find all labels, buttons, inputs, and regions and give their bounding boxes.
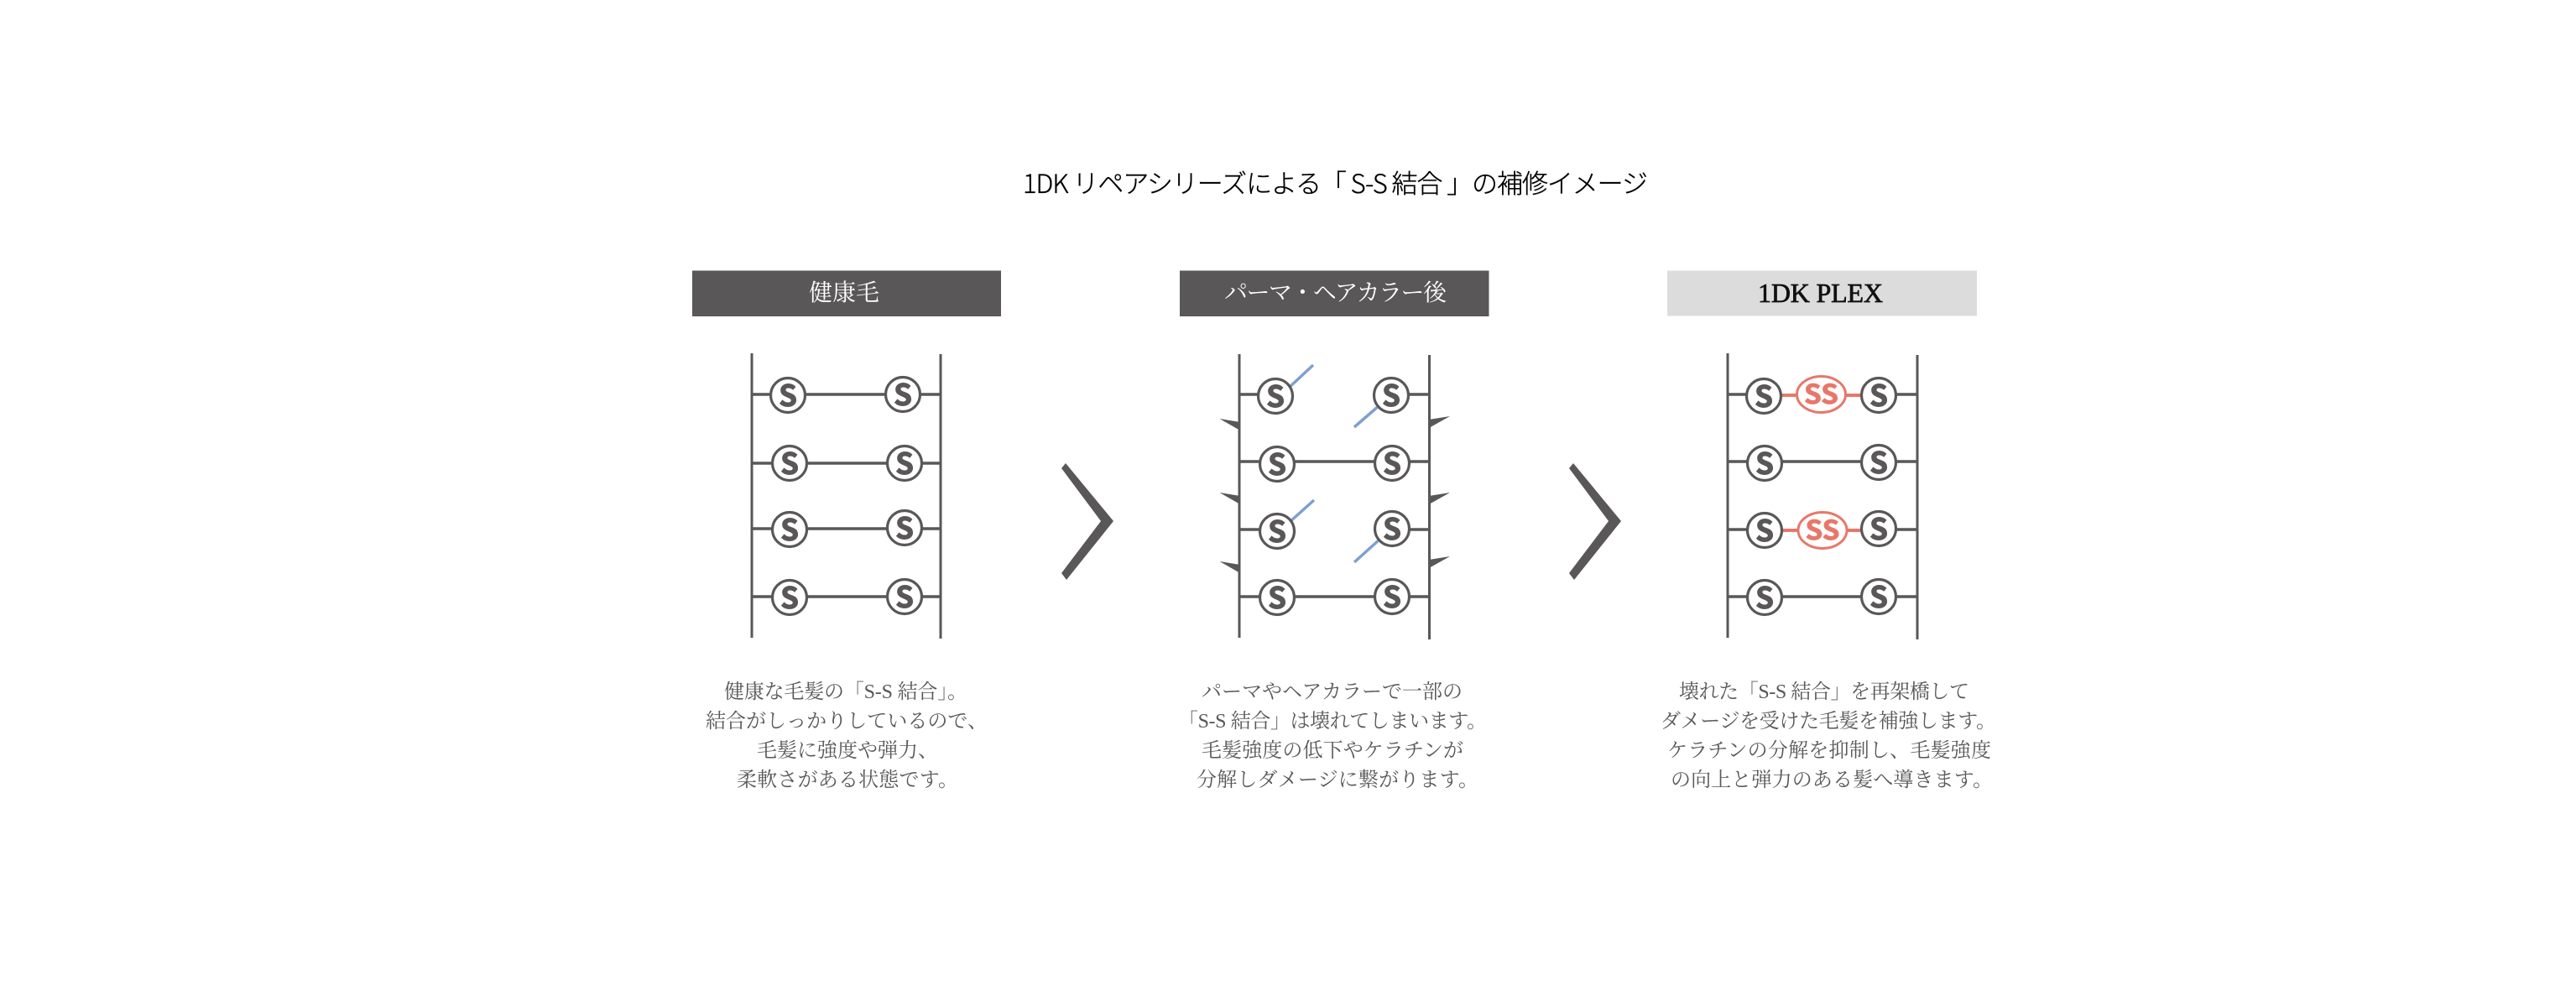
ladder diagram: repaired bonds: S	[1755, 575, 1774, 618]
repaired bond: SS top	[1797, 373, 1846, 413]
broken bond marks	[1289, 365, 1379, 562]
ladder diagram: repaired bonds: S	[1869, 506, 1888, 549]
ladder diagram: broken bonds	[1220, 354, 1450, 639]
ladder diagram: healthy bonds: S	[895, 441, 914, 483]
arrow: damaged to repaired	[1569, 463, 1621, 580]
description: healthy hair: 結合がしっかりしているので、	[706, 710, 988, 733]
ladder diagram: healthy bonds: S	[895, 505, 914, 548]
repaired bond: SS lower: SS	[1806, 509, 1839, 548]
heading: after perm and color	[1180, 270, 1489, 316]
description: after perm and color	[1178, 681, 1487, 791]
heading: healthy hair: 健康毛	[809, 274, 879, 308]
title: 1DK リペアシリーズによる「 S-S 結合 」の補修イメージ	[1023, 163, 1648, 201]
ladder diagram: repaired bonds: S	[1755, 441, 1774, 483]
ladder diagram: healthy bonds: S	[780, 575, 799, 618]
repaired bond: SS lower	[1798, 509, 1847, 549]
description: healthy hair: 柔軟さがある状態です。	[737, 769, 958, 791]
description: 1DK PLEX: ケラチンの分解を抑制し、毛髪強度	[1667, 739, 1991, 762]
description: healthy hair	[706, 681, 988, 791]
description: 1DK PLEX: 壊れた「S-S 結合」を再架橋して	[1679, 681, 1969, 703]
description: healthy hair: 健康な毛髪の「S-S 結合」。	[724, 681, 967, 703]
description: 1DK PLEX	[1661, 681, 1996, 791]
panel: healthy hair	[692, 270, 1001, 791]
ladder diagram: broken bonds: S	[1383, 506, 1401, 549]
description: after perm and color: パーマやヘアカラーで一部の	[1202, 681, 1463, 703]
description: after perm and color: 「S-S 結合」は壊れてしまいます。	[1178, 710, 1487, 733]
heading: 1DK PLEX: 1DK PLEX	[1758, 278, 1883, 308]
ladder diagram: repaired bonds: S	[1869, 440, 1888, 483]
description: after perm and color: 分解しダメージに繋がります。	[1197, 769, 1478, 791]
ladder diagram: broken bonds: S	[1383, 574, 1401, 617]
ladder diagram: healthy bonds	[752, 353, 941, 639]
panel: 1DK PLEX	[1661, 270, 1996, 791]
ladder diagram: broken bonds: S	[1268, 509, 1286, 551]
ladder diagram: repaired bonds: S	[1869, 373, 1888, 415]
description: after perm and color: 毛髪強度の低下やケラチンが	[1202, 739, 1463, 762]
ladder diagram: broken bonds: S	[1268, 441, 1286, 484]
ladder diagram: broken bonds: S	[1268, 575, 1286, 618]
heading: after perm and color: パーマ・ヘアカラー後	[1224, 274, 1447, 308]
ladder diagram: healthy bonds: S	[895, 574, 914, 617]
ladder diagram: broken bonds: S	[1382, 373, 1400, 415]
arrow: healthy to damaged	[1061, 463, 1113, 580]
ladder diagram: healthy bonds: S	[779, 373, 797, 415]
cuticle damage barbs	[1220, 416, 1450, 573]
ladder diagram: repaired bonds	[1728, 353, 1917, 639]
ladder diagram: repaired bonds: S	[1869, 574, 1888, 617]
description: 1DK PLEX: の向上と弾力のある髪へ導きます。	[1671, 769, 1993, 791]
description: 1DK PLEX: ダメージを受けた毛髪を補強します。	[1661, 710, 1996, 733]
ladder diagram: repaired bonds: S	[1755, 373, 1773, 416]
ladder diagram: healthy bonds: S	[894, 372, 912, 415]
panel: after perm and color	[1178, 270, 1489, 791]
repaired bond links	[1781, 395, 1866, 530]
ladder diagram: repaired bonds: S	[1755, 508, 1774, 550]
description: healthy hair: 毛髪に強度や弾力、	[757, 739, 938, 762]
ladder diagram: healthy bonds: S	[780, 441, 799, 483]
ladder diagram: broken bonds: S	[1383, 441, 1401, 483]
repaired bond: SS top: SS	[1804, 373, 1838, 412]
heading: healthy hair	[692, 270, 1001, 316]
heading: 1DK PLEX	[1667, 270, 1977, 316]
ladder diagram: healthy bonds: S	[780, 507, 799, 550]
ladder diagram: broken bonds: S	[1266, 373, 1285, 416]
